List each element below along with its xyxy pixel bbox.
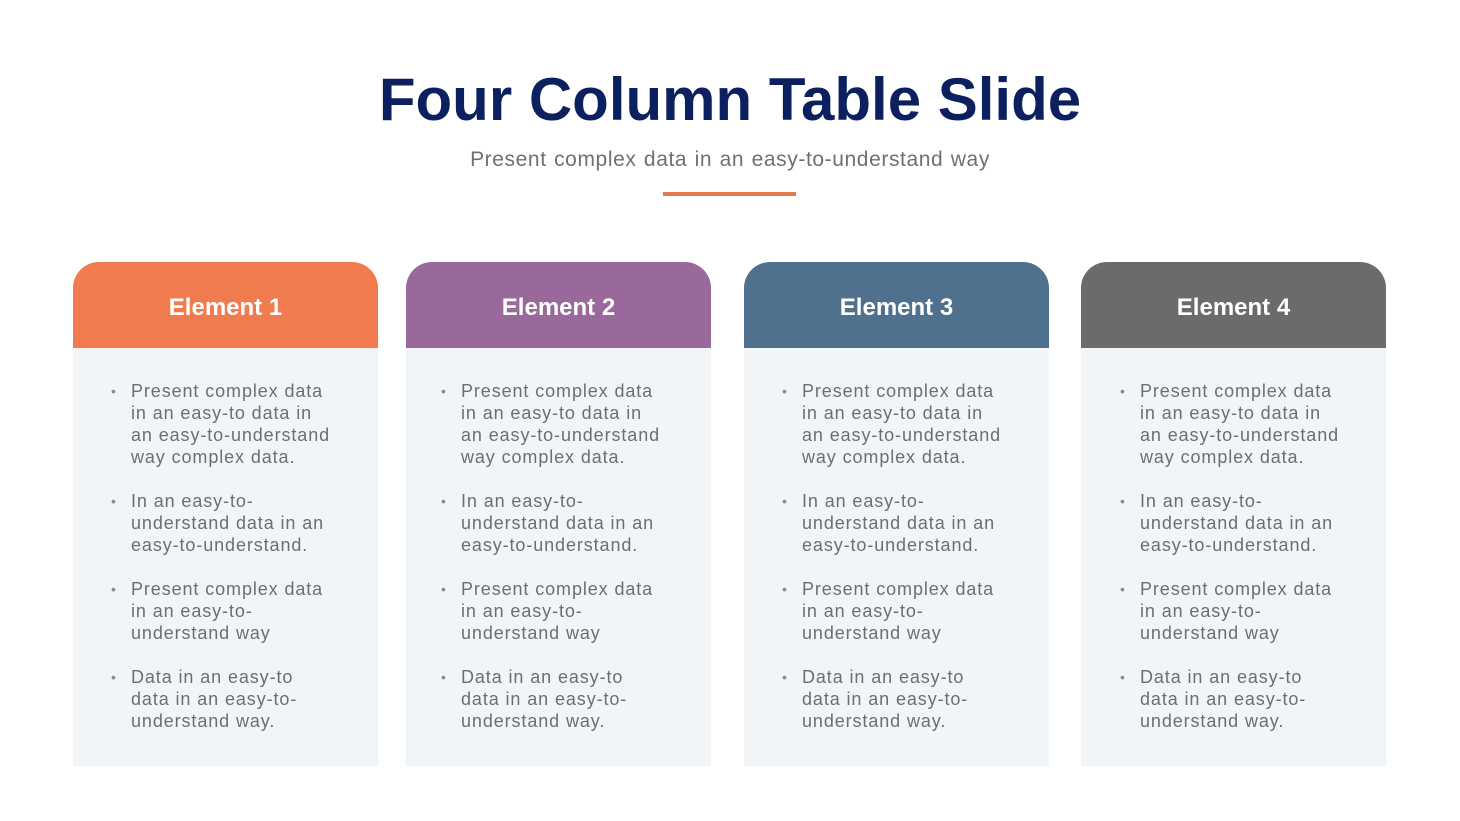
panel: element 4 (1081, 262, 1386, 766)
panel: element 1: easy-to-understand. (131, 535, 308, 555)
accent line (663, 192, 796, 196)
panel: element 2: in an easy-to data in (461, 403, 642, 423)
panel: element 1: in an easy-to data in (131, 403, 312, 423)
panel: element 3: In an easy-to- (802, 491, 925, 511)
panel: element 3: understand data in an (802, 513, 995, 533)
panel: element 4: In an easy-to- (1140, 491, 1263, 511)
subtitle: Present complex data in an easy-to-understand way (470, 148, 990, 171)
panel: element 1: understand data in an (131, 513, 324, 533)
panel: element 4: way complex data. (1140, 447, 1304, 467)
panel: element 3: Present complex data (802, 579, 994, 599)
panel: element 2: Present complex data (461, 579, 653, 599)
panel: element 4: understand data in an (1140, 513, 1333, 533)
panel: element 1: an easy-to-understand (131, 425, 330, 445)
panel: element 2: Data in an easy-to (461, 667, 623, 687)
panel: element 3: in an easy-to- (802, 601, 924, 621)
panel: element 3: Element 3 (840, 294, 953, 321)
panel: element 4: an easy-to-understand (1140, 425, 1339, 445)
panel: element 1 (73, 262, 378, 766)
panel: element 3: an easy-to-understand (802, 425, 1001, 445)
panel: element 1: data in an easy-to- (131, 689, 297, 709)
panel: element 4: in an easy-to data in (1140, 403, 1321, 423)
panel: element 1: understand way (131, 623, 271, 643)
panel: element 1: Data in an easy-to (131, 667, 293, 687)
panel: element 4: Present complex data (1140, 381, 1332, 401)
panel: element 4: in an easy-to- (1140, 601, 1262, 621)
panel: element 3: easy-to-understand. (802, 535, 979, 555)
panel: element 4: data in an easy-to- (1140, 689, 1306, 709)
panel: element 4: Element 4 (1177, 294, 1290, 321)
panel: element 2: In an easy-to- (461, 491, 584, 511)
panel: element 1: Element 1 (169, 294, 282, 321)
panel: element 3 (744, 262, 1049, 766)
panel: element 2: Element 2 (502, 294, 615, 321)
panel: element 1: way complex data. (131, 447, 295, 467)
panel: element 1: Present complex data (131, 381, 323, 401)
panel: element 2: easy-to-understand. (461, 535, 638, 555)
panel: element 3: Data in an easy-to (802, 667, 964, 687)
panel: element 3: understand way (802, 623, 942, 643)
panel: element 4: understand way (1140, 623, 1280, 643)
panel: element 2: Present complex data (461, 381, 653, 401)
panel: element 2 (406, 262, 711, 766)
panel: element 2: understand way. (461, 711, 605, 731)
panel: element 2: in an easy-to- (461, 601, 583, 621)
panel: element 3: way complex data. (802, 447, 966, 467)
panel: element 3: Present complex data (802, 381, 994, 401)
panel: element 1: Present complex data (131, 579, 323, 599)
panel: element 4: Data in an easy-to (1140, 667, 1302, 687)
title: Four Column Table Slide (379, 66, 1081, 133)
panel: element 2: way complex data. (461, 447, 625, 467)
panel: element 3: in an easy-to data in (802, 403, 983, 423)
panel: element 4: Present complex data (1140, 579, 1332, 599)
panel: element 3: understand way. (802, 711, 946, 731)
panel: element 1: in an easy-to- (131, 601, 253, 621)
panel: element 2: understand way (461, 623, 601, 643)
panel: element 3: data in an easy-to- (802, 689, 968, 709)
panel: element 2: an easy-to-understand (461, 425, 660, 445)
panel: element 4: easy-to-understand. (1140, 535, 1317, 555)
panel: element 4: understand way. (1140, 711, 1284, 731)
panel: element 2: understand data in an (461, 513, 654, 533)
panel: element 1: In an easy-to- (131, 491, 254, 511)
panel: element 2: data in an easy-to- (461, 689, 627, 709)
panel: element 1: understand way. (131, 711, 275, 731)
